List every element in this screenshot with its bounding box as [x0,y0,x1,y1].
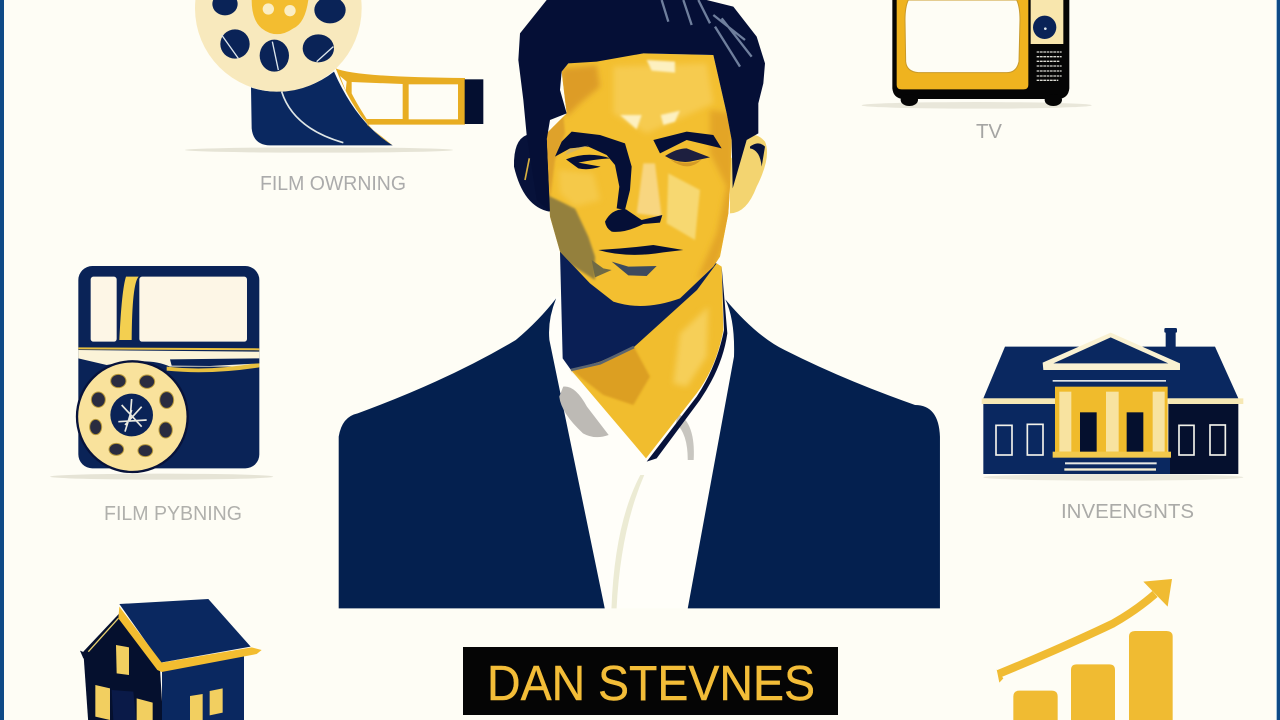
jacket and shirt [339,297,940,608]
label: film owrning: FILM OWRNING [260,173,406,195]
icon: house [80,599,262,720]
hair [518,0,765,212]
mouth [598,245,683,255]
label: tv: TV [976,121,1003,143]
face [547,53,732,306]
chart: rising bars and arrow [997,579,1173,720]
icon: film reel with film strip [185,0,483,153]
name banner: DAN STEVNES [487,657,815,711]
icon: mansion [982,328,1243,481]
eyebrows and eyes [555,132,632,210]
ears [514,135,550,212]
head [514,0,767,462]
portrait: man in navy jacket [339,0,940,608]
label: film pybning: FILM PYBNING [104,503,242,525]
label: inveengnts: INVEENGNTS [1061,501,1194,523]
icon: film camera with reel [50,266,273,480]
icon: retro tv [862,0,1092,109]
neck [571,263,723,458]
nose [605,209,662,232]
